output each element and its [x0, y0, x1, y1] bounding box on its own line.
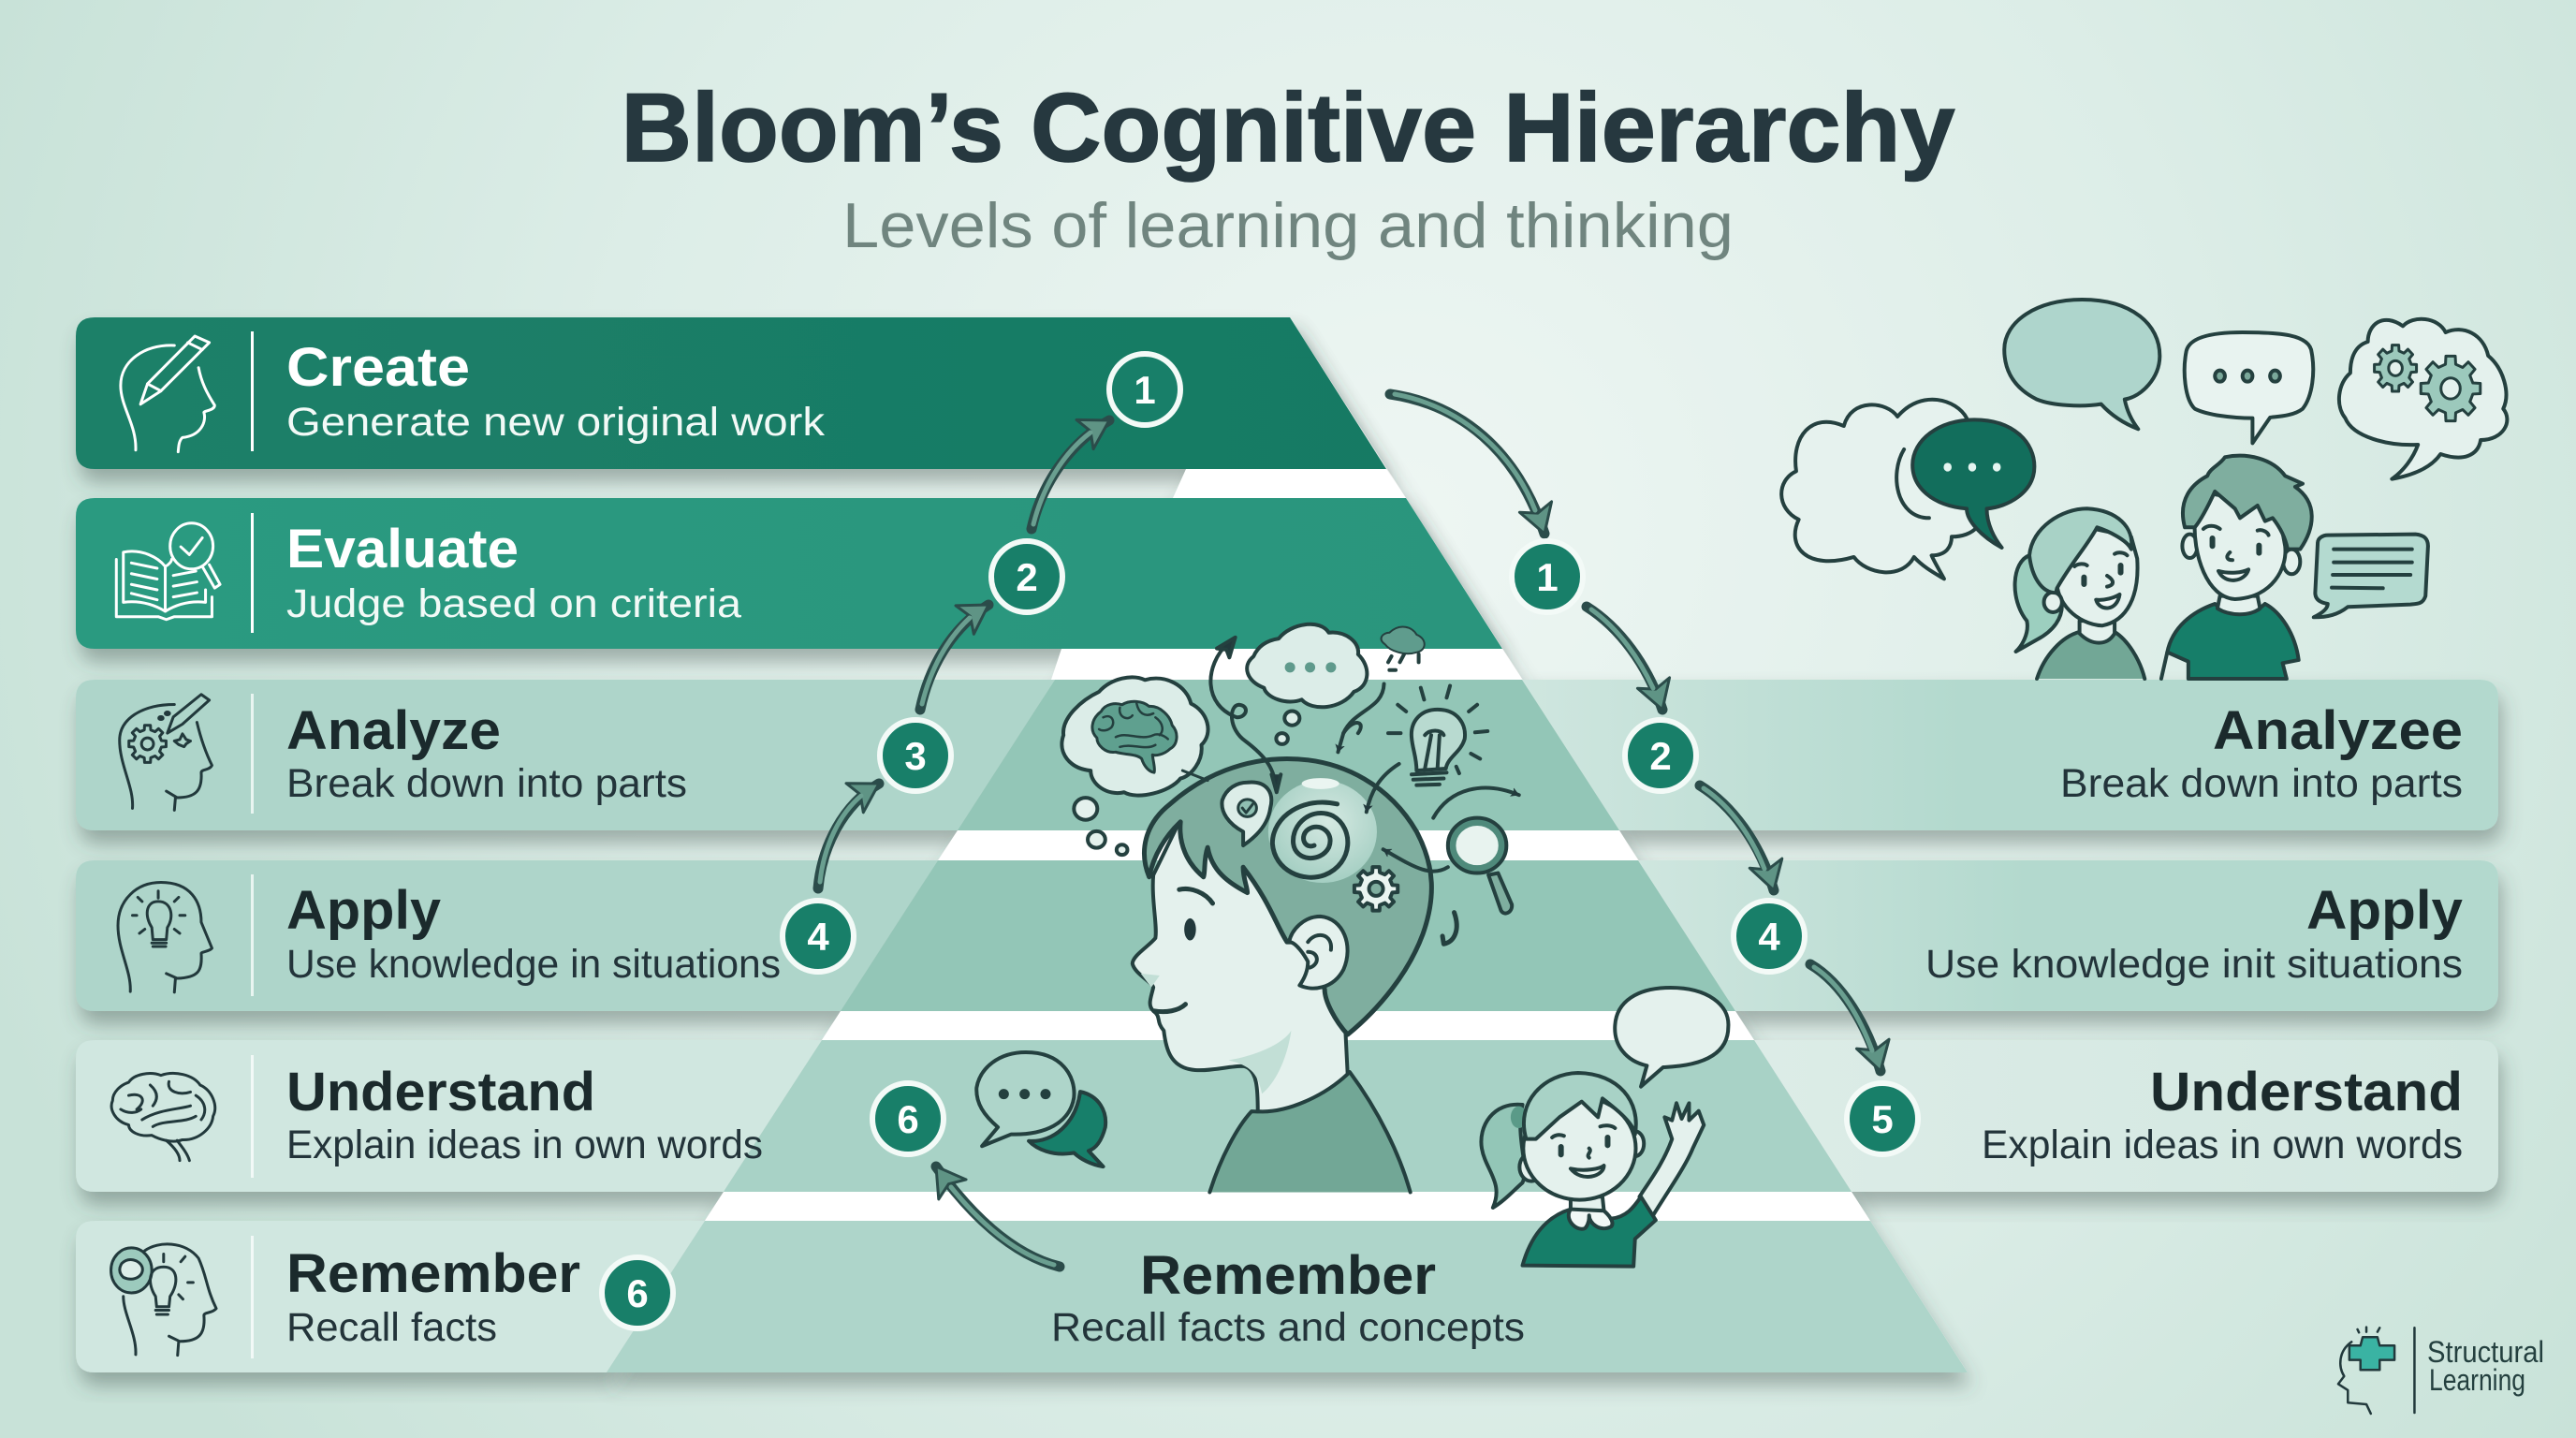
- badge 4 right: [1734, 901, 1805, 972]
- illustration: waving girl: [1481, 988, 1728, 1267]
- bar: analyzee right: Analyzee: [2213, 700, 2463, 761]
- girl neck and face: [2080, 620, 2115, 643]
- badge 4 left: [783, 901, 854, 972]
- icon: head with memory and bulb: [111, 1244, 216, 1356]
- bar: understand right: Understand: [2150, 1062, 2463, 1123]
- bar: analyze: Analyze: [286, 700, 501, 761]
- icon: head with gear and pencil: [120, 695, 212, 810]
- bar: analyzee right: [1522, 680, 2498, 830]
- arrow from magnifier: [1383, 849, 1448, 872]
- flow arrows: [818, 394, 1881, 1267]
- bar: analyze: Break down into parts: [286, 761, 687, 806]
- number badges: [602, 354, 1918, 1328]
- badge 6 left: 6: [626, 1271, 649, 1315]
- girl ears: [1519, 1153, 1544, 1181]
- white gap 3: [938, 830, 1638, 860]
- badge 3 left: 3: [904, 734, 927, 778]
- chat bubble with lines: [2314, 535, 2428, 617]
- arrow: 3 to 2 left: [920, 605, 988, 710]
- tier: understand: [724, 1040, 1852, 1192]
- bar: evaluate: Judge based on criteria: [286, 581, 741, 626]
- badge 4 left: 4: [807, 915, 829, 959]
- bar: evaluate: [76, 498, 1502, 649]
- boy shirt: [2167, 604, 2299, 679]
- girl shirt: [1523, 1196, 1656, 1267]
- badge 1 left: [1109, 354, 1180, 425]
- badge 5 right: 5: [1871, 1097, 1894, 1141]
- dotted rounded bubble: [2185, 332, 2313, 443]
- white gap 1: [1173, 469, 1406, 498]
- badge 2 left: 2: [1016, 555, 1038, 599]
- icon: book and magnifier: [116, 523, 220, 620]
- light bulb: [1412, 710, 1465, 770]
- arrow: 2 to 4 right: [1700, 785, 1774, 890]
- girl eyes and mouth: [1561, 1137, 1607, 1154]
- illustration: two children talking: [1781, 300, 2507, 679]
- bar: apply right: Use knowledge init situations: [1925, 942, 2463, 987]
- girl face details: [2084, 565, 2121, 584]
- girl face: [1523, 1097, 1636, 1200]
- white gap 2: [1051, 649, 1522, 680]
- girl collar: [1569, 1210, 1613, 1229]
- teal empty bubble: [2004, 300, 2159, 429]
- white gap 4: [822, 1011, 1754, 1040]
- arrow: 4 to 3 left: [818, 784, 879, 888]
- boy eye: [1184, 918, 1196, 940]
- boy neck: [2217, 596, 2260, 614]
- thought cloud with dots: [1247, 624, 1367, 707]
- pyramid base: [607, 317, 1968, 1372]
- bar: remember: Remember: [286, 1243, 580, 1304]
- bar: analyzee right: Break down into parts: [2060, 761, 2463, 806]
- arrow: 2 to 1 left: [1032, 420, 1109, 529]
- magnifier: [1451, 821, 1503, 870]
- storm cloud: [1382, 627, 1425, 653]
- right level bars: [1522, 680, 2498, 1192]
- left level bars: [76, 317, 1502, 1372]
- pyramid label: remember: Recall facts and concepts: [1051, 1305, 1525, 1350]
- boy hair: [2183, 456, 2312, 550]
- pyramid label: remember: [1051, 1245, 1525, 1350]
- boy eyebrow and smile: [1154, 888, 1213, 1012]
- badge 2 right: 2: [1649, 734, 1672, 778]
- arrow: bottom to 6: [936, 1167, 1060, 1267]
- boy ear: [1289, 917, 1348, 989]
- badge 5 right: [1847, 1083, 1918, 1154]
- bar: remember: [76, 1221, 705, 1372]
- white gap 5: [705, 1192, 1870, 1221]
- logo: Structural Learning: Learning: [2429, 1363, 2525, 1397]
- badge 6 centre: 6: [897, 1097, 919, 1141]
- boy face details: [2213, 538, 2259, 553]
- girl hair: [2029, 508, 2131, 593]
- bar: understand: Understand: [286, 1062, 595, 1123]
- bar: create: Generate new original work: [286, 400, 826, 445]
- illustration: boy with thoughts: [976, 624, 1519, 1192]
- cloud bubble left: [1781, 400, 1977, 579]
- bar: understand: [76, 1040, 822, 1192]
- dark green bubble: [1912, 419, 2034, 548]
- boy shirt: [1209, 1072, 1411, 1192]
- badge 6 left: [602, 1257, 673, 1328]
- small hook: [1442, 913, 1456, 944]
- boy arm line: [2161, 653, 2167, 679]
- bar: apply: [76, 860, 938, 1011]
- squiggle arrow up: [1210, 642, 1277, 790]
- bar: apply: Use knowledge in situations: [286, 942, 781, 987]
- bar: apply right: Apply: [2306, 880, 2463, 941]
- arrow right: [1433, 788, 1519, 818]
- brain thought cloud: [1061, 677, 1208, 796]
- girl ponytail: [1481, 1105, 1525, 1208]
- subtitle: Levels of learning and thinking: [842, 190, 1734, 261]
- nose shadow: [1141, 974, 1160, 988]
- pyramid label: remember: Remember: [1140, 1245, 1436, 1306]
- girl shirt: [2037, 632, 2144, 679]
- head gear: [1354, 867, 1398, 911]
- speech bubbles pair: [1029, 1092, 1105, 1167]
- arrow down from cloud: [1343, 683, 1384, 733]
- bar: remember: Recall facts: [286, 1305, 497, 1350]
- bar: create: [76, 317, 1386, 469]
- neck shadow: [1228, 1031, 1291, 1093]
- girl arm and hand: [1639, 1103, 1704, 1217]
- check bubble: [1222, 782, 1271, 845]
- tier: analyze: [958, 680, 1619, 830]
- badge 4 right: 4: [1758, 915, 1780, 959]
- boy face: [2195, 493, 2286, 599]
- bar: understand right: [1754, 1040, 2498, 1192]
- boy ears: [2182, 535, 2197, 558]
- arrow: 1 to 2 right: [1587, 607, 1662, 710]
- arrow into head: [1367, 764, 1399, 812]
- icon: brain: [111, 1073, 215, 1161]
- brain: [1092, 701, 1177, 772]
- icon: head with light bulb: [118, 883, 212, 992]
- girl speech bubble: [1615, 988, 1728, 1087]
- badge 3 left: [880, 720, 951, 791]
- arrow: 4 to 5 right: [1810, 964, 1881, 1071]
- understand description left: Explain ideas in own words: [286, 1123, 763, 1167]
- pyramid tiers and gaps: [607, 469, 1968, 1372]
- badge 6 centre: [872, 1083, 944, 1154]
- badge 2 right: [1625, 720, 1696, 791]
- gear cloud: [2339, 319, 2507, 479]
- boy face and neck: [1133, 824, 1348, 1111]
- badge 1 right: 1: [1536, 555, 1559, 599]
- logo text: Structural: [2427, 1335, 2544, 1369]
- badge 2 left: [991, 541, 1062, 612]
- swirl globe: [1268, 781, 1377, 883]
- title: Bloom’s Cognitive Hierarchy: [622, 74, 1955, 183]
- girl ponytail: [2015, 555, 2062, 652]
- bar: apply right: [1638, 860, 2498, 1011]
- girl neck: [1571, 1196, 1604, 1211]
- bar: understand right: Explain ideas in own words: [1982, 1123, 2463, 1167]
- bar: evaluate: Evaluate: [286, 519, 519, 580]
- bar: create: Create: [286, 337, 470, 398]
- tier: remember: [607, 1221, 1968, 1372]
- bar: apply: Apply: [286, 880, 441, 941]
- icon: head with pencil: [121, 336, 214, 452]
- logo mark: [2338, 1328, 2414, 1414]
- badge 1 right: [1512, 541, 1583, 612]
- girl hair: [1524, 1073, 1636, 1139]
- arrow: top right to 1: [1390, 394, 1544, 534]
- bar: analyze: [76, 680, 1055, 830]
- boy hair: [1144, 758, 1431, 1034]
- badge 1 left: 1: [1134, 368, 1156, 412]
- logo: Structural Learning: [2338, 1328, 2544, 1414]
- tier: apply: [841, 860, 1735, 1011]
